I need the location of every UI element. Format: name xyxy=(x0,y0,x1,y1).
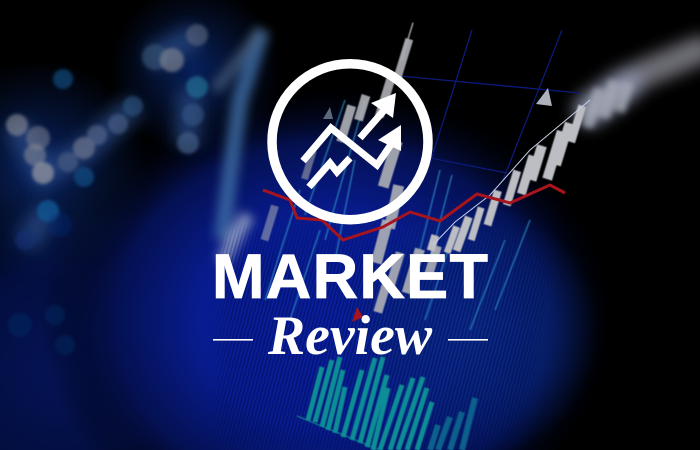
teal volume bars xyxy=(297,357,475,450)
blurred top of right candles xyxy=(582,79,633,129)
bokeh lights: blurred left chart xyxy=(6,24,208,355)
gray candlesticks: right rising band xyxy=(427,105,586,254)
logo circle xyxy=(272,64,428,220)
chart triangle markers xyxy=(323,88,552,322)
chart grid lines xyxy=(400,30,580,180)
subtitle side rule: right xyxy=(448,339,488,341)
gray candlesticks: central rising band xyxy=(261,22,442,314)
blurred streak: top right candles xyxy=(590,50,700,110)
blue background candle wicks xyxy=(265,100,530,330)
bokeh halos: blurred left chart xyxy=(15,35,197,245)
subtitle side rule: left xyxy=(213,339,253,341)
blurred streaks: left chart xyxy=(215,30,262,262)
red moving average line xyxy=(263,185,565,240)
title: MARKET: MARKET xyxy=(212,242,488,312)
subtitle: Review: Review xyxy=(267,305,433,367)
thin trend line xyxy=(433,100,590,245)
striped chart screen texture xyxy=(214,210,552,450)
icon: rising chart arrows xyxy=(303,93,401,187)
logo badge xyxy=(272,64,428,220)
